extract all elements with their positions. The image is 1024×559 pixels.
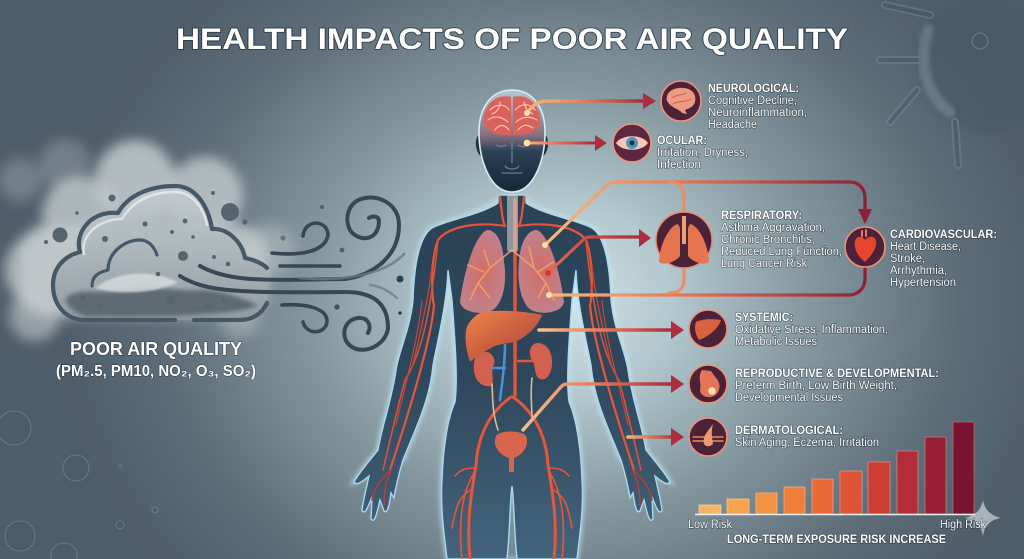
connector: ocular [524, 135, 607, 151]
label: systemic: Metabolic Issues [735, 336, 817, 348]
poor air quality label: POOR AIR QUALITY [70, 339, 242, 359]
icon: sparkle [965, 500, 1001, 536]
bar chart: long-term exposure risk [688, 422, 1001, 546]
label: respiratory: Chronic Bronchitis, [721, 234, 815, 246]
icon: lungs [656, 212, 712, 268]
bar chart: long-term exposure risk: LONG-TERM EXPOSURE RISK INCREASE [727, 532, 946, 546]
body silhouette [354, 195, 670, 559]
label: respiratory: Asthma Aggravation, [721, 222, 825, 234]
connector: systemic [539, 321, 684, 339]
connector: lungs to cardiovascular lower [546, 268, 865, 298]
vessels [372, 197, 652, 559]
bar chart: long-term exposure risk: High Risk [940, 519, 986, 531]
icon: liver [689, 310, 727, 348]
label: respiratory [721, 208, 842, 270]
label: ocular: OCULAR: [657, 133, 707, 147]
connector: respiratory to cardiovascular upper [542, 182, 872, 248]
label: systemic [735, 310, 888, 348]
label: dermatological [735, 423, 879, 449]
label: reproductive and developmental: Preterm Birth, Low Birth Weight, [735, 380, 897, 392]
label: systemic: Oxidative Stress, Inflammation, [735, 324, 888, 336]
connector: lungs to respiratory icon [545, 229, 651, 276]
icon: eye [613, 124, 651, 162]
icon: skin and hair [689, 418, 727, 456]
lungs [460, 230, 564, 313]
label: reproductive and developmental [735, 366, 939, 404]
liver [466, 311, 542, 362]
label: cardiovascular [890, 227, 997, 289]
body glow [354, 200, 670, 559]
background virus illustration [880, 0, 1024, 165]
label: dermatological: DERMATOLOGICAL: [735, 423, 843, 437]
face [496, 143, 528, 173]
label: cardiovascular: Heart Disease, [890, 241, 961, 253]
label: cardiovascular: Arrhythmia, [890, 265, 947, 277]
label: ocular: Irritation, Dryness, [657, 147, 748, 159]
label: neurological: Cognitive Decline, [708, 95, 797, 107]
human body figure [354, 90, 670, 559]
poor air quality label [56, 339, 256, 380]
kidneys and blue vessel [474, 343, 552, 430]
head [479, 90, 545, 192]
connector: reproductive [523, 375, 684, 430]
icon: pregnancy [689, 365, 727, 403]
label: reproductive and developmental: REPRODUCTIVE & DEVELOPMENTAL: [735, 366, 939, 380]
label: respiratory: Lung Cancer Risk [721, 258, 807, 270]
label: cardiovascular: Stroke, [890, 253, 925, 265]
icon: brain [661, 81, 701, 121]
trachea [507, 194, 518, 252]
connector: dermatological [628, 428, 684, 446]
cloud icon with particles [44, 186, 286, 320]
icon: heart [845, 227, 885, 267]
poor air quality label: (PM₂.5, PM10, NO₂, O₃, SO₂) [56, 363, 256, 380]
label: cardiovascular: Hypertension [890, 277, 956, 289]
label: respiratory: Reduced Lung Function, [721, 246, 842, 258]
label: dermatological: Skin Aging, Eczema, Irritation [735, 437, 879, 449]
label: respiratory: RESPIRATORY: [721, 208, 802, 222]
label: neurological: NEUROLOGICAL: [708, 81, 799, 95]
bar chart: long-term exposure risk: Low Risk [688, 519, 732, 531]
background cells [0, 411, 158, 559]
label: neurological: Neuroinflammation, [708, 107, 807, 119]
label: ocular: Infection [657, 159, 701, 171]
bladder [495, 432, 527, 472]
label: reproductive and developmental: Developmental Issues [735, 392, 843, 404]
label: neurological [708, 81, 807, 131]
ears [476, 135, 548, 157]
label: cardiovascular: CARDIOVASCULAR: [890, 227, 997, 241]
title: HEALTH IMPACTS OF POOR AIR QUALITY [176, 23, 848, 56]
label: neurological: Headache [708, 119, 757, 131]
label: ocular [657, 133, 748, 171]
label: systemic: SYSTEMIC: [735, 310, 793, 324]
brain [484, 96, 540, 135]
connector: neurological [524, 93, 656, 116]
wind swirls [180, 197, 404, 350]
smoke cloud [0, 139, 296, 341]
